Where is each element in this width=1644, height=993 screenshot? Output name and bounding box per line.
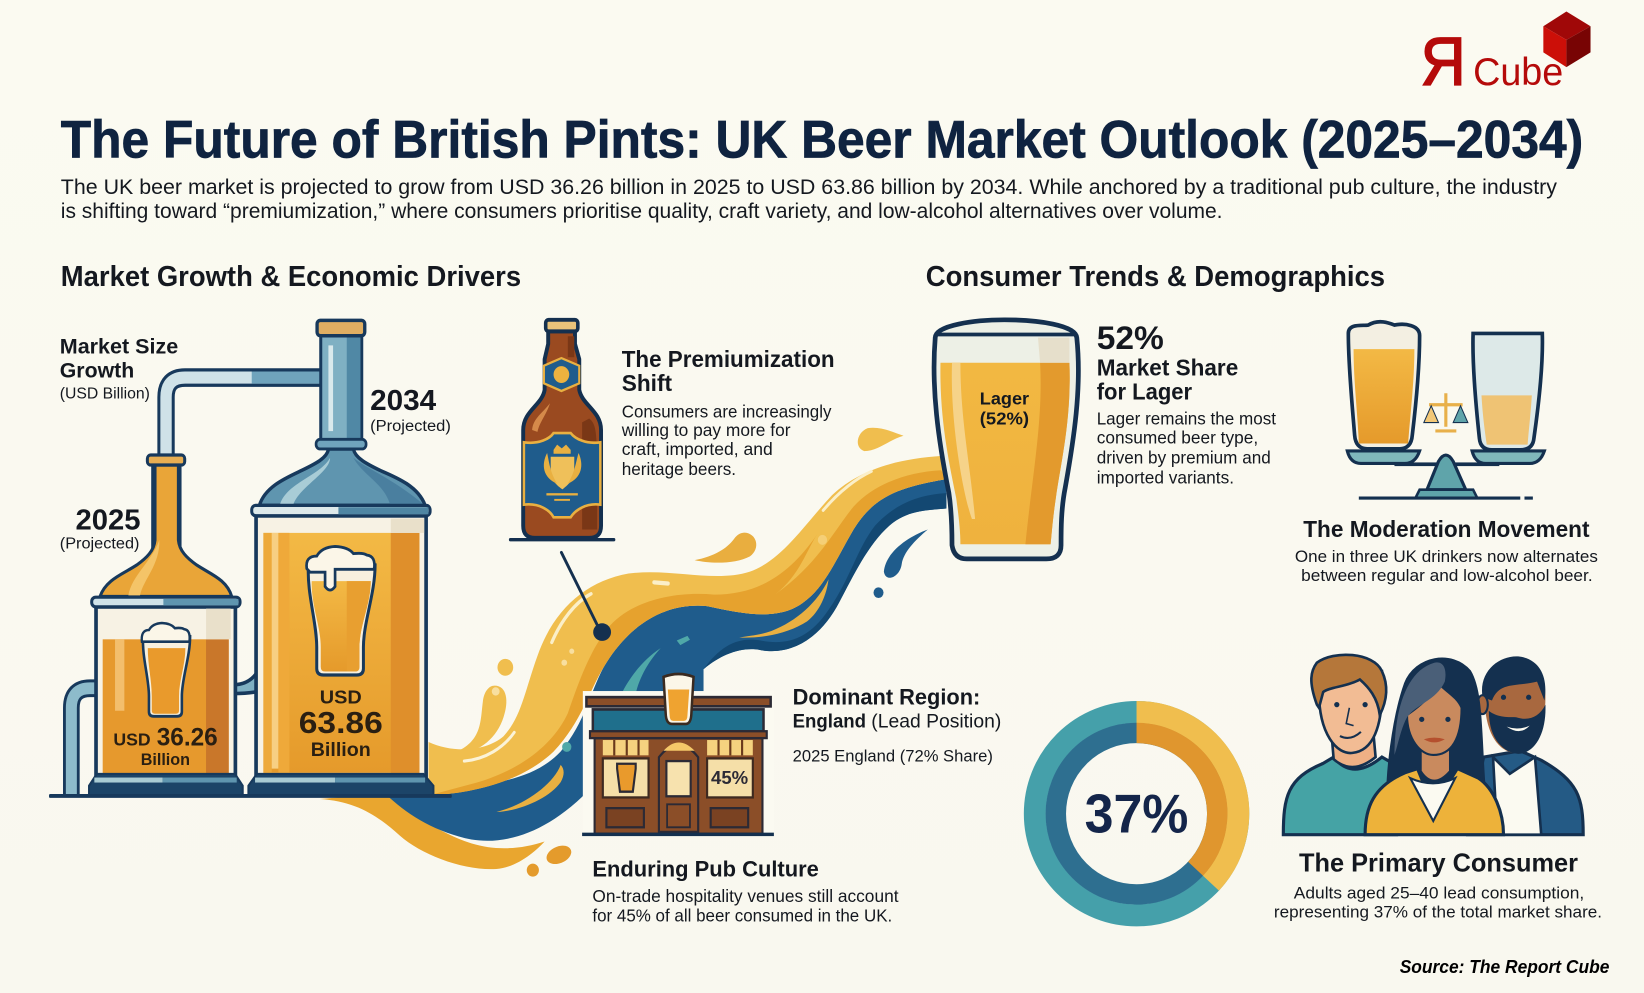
brewing tanks chart xyxy=(49,320,452,798)
icon: pub building: 45% xyxy=(711,768,748,788)
label: market size growth xyxy=(60,335,178,402)
text: 52% market share for lager: imported variants. xyxy=(1097,467,1234,487)
subtitle intro text xyxy=(61,176,1557,223)
label: 2025 projected: 2025 xyxy=(75,504,140,536)
tank: 2034 xyxy=(248,320,433,795)
text: the premiumization shift: Shift xyxy=(622,370,672,396)
icon: pint glass small xyxy=(142,623,190,716)
text: dominant region: 2025 England (72% Share) xyxy=(793,747,993,765)
label: 2034 projected: (Projected) xyxy=(370,418,451,435)
text: 52% market share for lager: Market Share xyxy=(1097,354,1238,380)
subtitle intro text: is shifting toward “premiumization,” where consumers prioritise quality, craft variety, and low-alcohol alternatives over volume. xyxy=(61,200,1223,223)
value: 2025 market size xyxy=(113,724,218,769)
icon: pint glass large xyxy=(307,546,375,675)
text: enduring pub culture: for 45% of all beer consumed in the UK. xyxy=(592,906,892,926)
text: enduring pub culture xyxy=(592,857,899,926)
label: 2034 projected xyxy=(370,384,451,435)
label: 2025 projected xyxy=(60,504,140,552)
text: dominant region xyxy=(793,685,1001,765)
value: 2025 market size: 36.26 xyxy=(157,724,218,752)
icon: lager glass 52%: Lager xyxy=(980,389,1029,409)
text: the premiumization shift: Consumers are increasingly xyxy=(622,401,832,421)
donut chart: 37% xyxy=(1035,712,1238,915)
text: dominant region: (Lead Position) xyxy=(871,711,1001,733)
person: man in teal xyxy=(1283,655,1397,835)
label: market size growth: (USD Billion) xyxy=(60,385,150,402)
text: 52% market share for lager: for Lager xyxy=(1097,379,1192,405)
connecting pipe xyxy=(71,378,322,797)
icon: moderation balance xyxy=(1347,322,1544,500)
value: 2025 market size: USD xyxy=(113,730,151,750)
heading: market growth: Market Growth & Economic Drivers xyxy=(61,260,521,292)
text: the premiumization shift: willing to pay more for xyxy=(621,420,791,440)
person: woman in yellow xyxy=(1365,659,1504,835)
text: the moderation movement xyxy=(1295,516,1598,585)
text: the premiumization shift: heritage beers. xyxy=(622,459,736,479)
label: 2034 projected: 2034 xyxy=(370,384,436,416)
text: 52% market share for lager xyxy=(1097,320,1276,487)
text: 52% market share for lager: 52% xyxy=(1097,320,1164,356)
title: The Future of British Pints: UK Beer Market Outlook (2025–2034) xyxy=(61,111,1583,169)
text: the primary consumer: Adults aged 25–40 lead consumption, xyxy=(1294,884,1584,903)
text: 52% market share for lager: Lager remains the most xyxy=(1097,409,1276,429)
value: 2034 market size xyxy=(299,687,383,760)
text: the moderation movement: One in three UK drinkers now alternates xyxy=(1295,547,1598,566)
icon: lager glass 52% xyxy=(934,320,1078,559)
subtitle intro text: The UK beer market is projected to grow from USD 36.26 billion in 2025 to USD 63.86 billion by 2034. While anchored by a traditional pub culture, the industry xyxy=(61,176,1557,199)
text: the primary consumer: representing 37% of the total market share. xyxy=(1274,903,1602,922)
person: man with beard xyxy=(1468,656,1583,835)
label: market size growth: Market Size xyxy=(60,335,178,358)
beer and blue wave flow xyxy=(320,428,946,877)
callout: premiumization pointer xyxy=(561,552,611,641)
value: 2034 market size: 63.86 xyxy=(299,706,383,740)
source note: Source: The Report Cube xyxy=(1400,956,1609,977)
icon: lager glass 52%: (52%) xyxy=(980,409,1029,429)
icon: three primary consumers xyxy=(1283,655,1583,835)
icon: pint on pub roof xyxy=(664,674,694,724)
icon: small scales xyxy=(1424,393,1468,431)
text: the premiumization shift: craft, imported, and xyxy=(622,439,773,459)
icon: pub building xyxy=(582,674,774,836)
text: 52% market share for lager: driven by premium and xyxy=(1097,447,1271,467)
text: 52% market share for lager: consumed beer type, xyxy=(1097,428,1258,448)
logo: RCube: Я xyxy=(1421,24,1466,100)
logo: RCube: Cube xyxy=(1473,51,1563,94)
icon: premium beer bottle xyxy=(509,320,615,541)
text: the premiumization shift: The Premiumization xyxy=(622,346,835,372)
text: enduring pub culture: On-trade hospitality venues still account xyxy=(592,886,899,906)
text: the moderation movement: between regular and low-alcohol beer. xyxy=(1301,566,1593,585)
tank: 2025 xyxy=(89,455,243,795)
text: dominant region: Dominant Region: xyxy=(793,685,980,710)
value: 2034 market size: USD xyxy=(320,687,362,708)
value: 2025 market size: Billion xyxy=(141,752,190,769)
text: dominant region: England xyxy=(793,711,866,733)
value: 2034 market size: Billion xyxy=(311,739,371,760)
text: the primary consumer xyxy=(1274,847,1602,922)
text: the primary consumer: The Primary Consumer xyxy=(1299,847,1578,877)
heading: consumer trends: Consumer Trends & Demographics xyxy=(926,260,1385,292)
label: 2025 projected: (Projected) xyxy=(60,535,139,552)
text: the premiumization shift xyxy=(621,346,835,479)
label: market size growth: Growth xyxy=(60,359,134,382)
text: the moderation movement: The Moderation Movement xyxy=(1303,516,1590,542)
donut chart: 37%: 37% xyxy=(1085,784,1188,845)
text: enduring pub culture: Enduring Pub Culture xyxy=(592,857,819,882)
logo: RCube xyxy=(1421,12,1591,100)
